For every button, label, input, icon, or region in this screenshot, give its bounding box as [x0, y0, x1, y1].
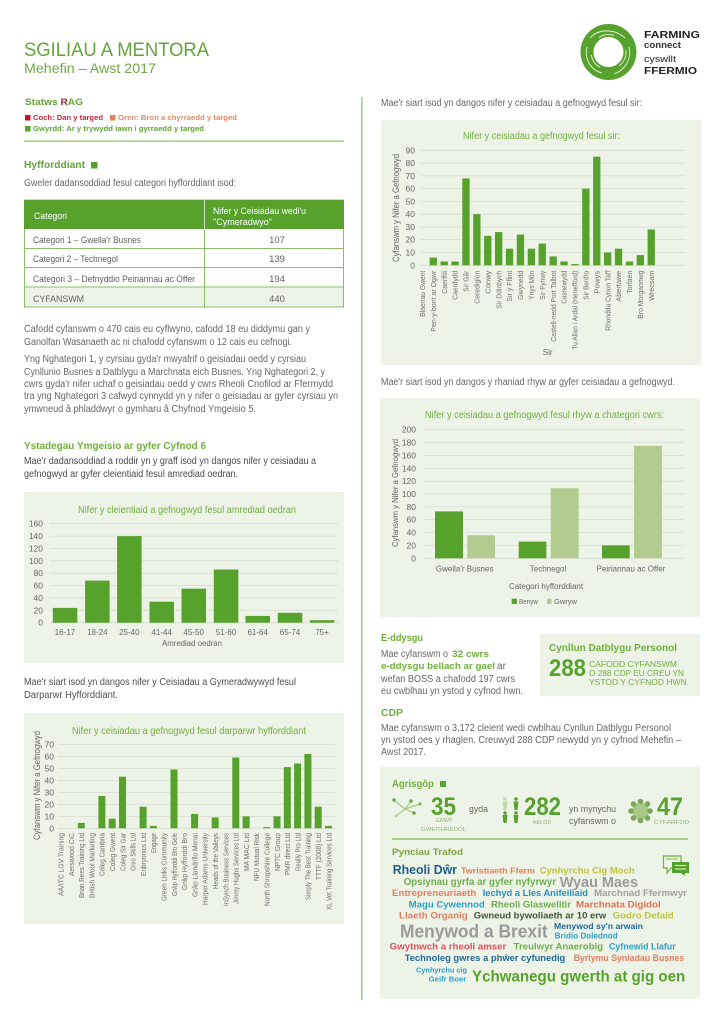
icon: people	[502, 797, 518, 823]
panel: training provider bar chart	[24, 713, 344, 924]
panel: training provider bar chart: Creo Skills Ltd	[131, 833, 138, 871]
callout: Cynllun Datblygu Personol: Cynllun Datblygu Personol	[549, 643, 677, 654]
table: categories: Categori 1 – Gwella'r Busnes	[33, 235, 141, 246]
heading: Hyfforddiant: Hyfforddiant	[24, 160, 86, 171]
table: categories: 194	[269, 274, 285, 285]
panel: county bar chart: 80	[406, 158, 415, 168]
panel: age range bar chart: 41-44	[151, 628, 172, 637]
panel: training provider bar chart: Nifer y ceisiadau a gefnogwyd fesul darparwr hyfforddiant	[72, 726, 306, 737]
section: CDP: Awst 2017.	[381, 747, 426, 758]
section: CDP: Mae cyfanswm o 3,172 cleient wedi cwblhau Cynllun Datblygu Personol	[381, 723, 671, 734]
word cloud: discussion topics: Llaeth Organig	[399, 911, 468, 922]
word cloud: discussion topics: Marchnata Digidol	[576, 900, 661, 911]
panel: gender and category bar chart: 200	[402, 425, 416, 435]
panel: county bar chart: 40	[406, 209, 415, 219]
panel: gender and category bar chart: 120	[402, 476, 416, 486]
panel: county bar chart: Gwynedd	[518, 271, 525, 300]
panel: training provider bar chart: 30	[45, 787, 54, 797]
panel: county bar chart: Ceredigion	[474, 271, 482, 304]
section: E-ddysgu	[380, 633, 523, 697]
word cloud: discussion topics: Marchnad Ffermwyr	[594, 888, 687, 899]
panel: training provider bar chart: Grŵp Llandrillo Menai	[192, 833, 199, 897]
word cloud: discussion topics: Ychwanegu gwerth at gig oen	[472, 969, 685, 986]
panel: gender and category bar chart: 60	[407, 515, 416, 525]
panel: gender and category bar chart: Gwella'r Busnes	[436, 565, 493, 574]
RAG status legend: Coch: Dan y targed	[33, 113, 103, 122]
panel: county bar chart: Casnewydd	[562, 271, 569, 304]
word cloud: discussion topics: Technoleg gwres a phŵer cyfunedig	[405, 953, 565, 964]
icon: network	[392, 798, 422, 818]
panel: training provider bar chart: North Shropshire College	[264, 833, 272, 906]
word cloud: discussion topics: Magu Cywennod	[409, 900, 485, 911]
word cloud: discussion topics: Iechyd a Lles Anifeiliaid	[483, 888, 588, 899]
panel: training provider bar chart: NPTC Group	[275, 833, 282, 871]
word cloud: discussion topics: Treulwyr Anaerobig	[514, 941, 603, 952]
callout: Cynllun Datblygu Personol	[540, 634, 700, 696]
panel: county bar chart: Bro Morgannwg	[638, 271, 645, 319]
panel: county bar chart: Sir y Fflint	[507, 271, 514, 302]
text block: summary: Ganolfan Wasanaeth ac ni chafodd cyfanswm o 12 cais eu cefnogi.	[24, 337, 292, 348]
text block: summary: tra yng Nghategori 3 cafwyd cynnydd yn y nifer o geisiadau ar gyfer cyrsiau yn	[24, 391, 338, 402]
panel: age range bar chart: 51-60	[216, 628, 237, 637]
section: E-ddysgu: eu cwblhau yn ystod y cyfnod hwn.	[381, 686, 523, 697]
panel: training provider bar chart: PMR direct Ltd	[285, 833, 292, 875]
panel: county bar chart: 90	[406, 145, 415, 155]
panel: gender and category bar chart: Cyfanswm y Nifer a Gefnogwyd	[390, 439, 400, 547]
panel: county bar chart	[381, 120, 701, 365]
panel: age range bar chart: 40	[34, 593, 43, 603]
table: categories: Categori 2 – Technegol	[33, 254, 118, 265]
table: categories: CYFANSWM	[33, 294, 84, 305]
panel: county bar chart: Sir Benfro	[584, 271, 590, 300]
table: categories: 139	[269, 254, 285, 265]
word cloud: discussion topics	[390, 863, 687, 986]
text block: summary	[24, 324, 338, 415]
panel: training provider bar chart: TTTF (2008) Ltd	[316, 833, 323, 880]
panel: training provider bar chart: Grŵp Hyfforddi Bro	[182, 833, 189, 890]
panel: age range bar chart: 25-40	[119, 628, 140, 637]
text block: summary: Cynllunio Busnes a Datblygu a Marchnata eich Busnes. Yng Nghategori 2, y	[24, 367, 325, 378]
panel: Agrisgôp: Pynciau Trafod	[392, 847, 463, 858]
callout: Cynllun Datblygu Personol: CAFODD CYFANSWM	[589, 660, 677, 669]
panel: age range bar chart: 75+	[315, 628, 329, 637]
text: gender chart intro: Mae'r siart isod yn dangos y rhaniad rhyw ar gyfer ceisiadau a gefnogwyd.	[381, 377, 675, 388]
panel: Agrisgôp: CYFARFOD	[654, 820, 689, 826]
panel: county bar chart: Caerdydd	[453, 271, 460, 300]
panel: training provider bar chart: Cyfanswm y Nifer a Gefnogwyd	[32, 731, 42, 840]
panel: training provider bar chart: 70	[45, 739, 54, 749]
panel: training provider bar chart: Coleg Cambria	[100, 833, 107, 876]
panel: training provider bar chart: Jimmy Hughs Services Ltd	[234, 833, 241, 904]
panel: training provider bar chart: Heads of the Valleys	[213, 833, 220, 889]
panel: age range bar chart: Amrediad oedran	[162, 639, 222, 648]
panel: training provider bar chart: British Wool Marketing	[89, 833, 96, 898]
panel: county bar chart: Nifer y ceisiadau a gefnogwyd fesul sir:	[463, 131, 620, 142]
section: CDP: yn ystod oes y rhaglen. Creuwyd 288 CDP newydd yn y cyfnod Mehefin –	[381, 735, 682, 746]
panel: Agrisgôp: 282	[524, 793, 561, 821]
table: categories: Nifer y Ceisiadau wedi'u	[213, 206, 306, 217]
panel: county bar chart: 70	[406, 171, 415, 181]
panel: county bar chart: Sir Ddinbych	[496, 271, 503, 309]
section: E-ddysgu: wefan BOSS a chafodd 197 cwrs	[380, 674, 515, 685]
panel: county bar chart: Sir Gâr	[464, 270, 471, 292]
text block: age intro: gefnogwyd ar gyfer cleientiaid fesul amrediad oedran.	[24, 469, 238, 480]
table: categories: Categori 3 – Defnyddio Peiriannau ac Offer	[33, 274, 195, 285]
panel: county bar chart: 30	[406, 222, 415, 232]
word cloud: discussion topics: Menywod a Brexit	[400, 921, 548, 941]
panel: training provider bar chart: Simply The Best Training	[306, 833, 313, 900]
panel: county bar chart: Abertawe	[616, 271, 623, 302]
panel: training provider bar chart: Harper Adams University	[203, 833, 210, 905]
panel: county bar chart: Powys	[594, 270, 601, 294]
panel: training provider bar chart: Green Links Community	[162, 833, 168, 901]
panel: gender and category bar chart: 40	[407, 528, 416, 538]
section: CDP	[381, 708, 682, 758]
section: E-ddysgu: E-ddysgu	[381, 633, 423, 644]
title: SGILIAU A MENTORA	[24, 40, 209, 61]
section: E-ddysgu: ar	[497, 661, 507, 672]
word cloud: discussion topics: Cyfnewid Llafur	[609, 941, 676, 952]
panel: gender and category bar chart: 100	[402, 489, 416, 499]
text block: summary: ymwneud â phladdwyr o gymharu â Chyfnod Ymgeisio 5.	[24, 404, 256, 415]
callout: Cynllun Datblygu Personol: 288	[549, 655, 586, 682]
RAG status legend	[25, 97, 237, 133]
panel: gender and category bar chart: 0	[411, 553, 416, 563]
panel: training provider bar chart: InSynch Business Services	[223, 833, 230, 906]
panel: training provider bar chart: Aerswood CiC	[69, 833, 76, 876]
heading: Ystadegau Ymgeisio: Ystadegau Ymgeisio ar gyfer Cyfnod 6	[24, 441, 206, 452]
panel: training provider bar chart: Engage	[151, 833, 158, 853]
panel: Agrisgôp: GWEITHREDOL	[421, 827, 466, 833]
panel: training provider bar chart: Coleg Sir Gar	[120, 832, 127, 871]
RAG status legend: Oren: Bron a chyrraedd y targed	[118, 113, 237, 122]
panel: county bar chart: Sir Fynwy	[540, 270, 547, 300]
table: categories	[24, 200, 344, 307]
panel: training provider bar chart: AA/ITC LGV Training	[58, 833, 66, 896]
panel: Agrisgôp: Agrisgôp	[392, 779, 434, 790]
word cloud: discussion topics: Cynhyrchu Cig Moch	[540, 866, 635, 877]
panel: county bar chart: Sir	[543, 348, 553, 357]
panel: gender and category bar chart: 160	[402, 450, 416, 460]
panel: training provider bar chart: 60	[45, 751, 54, 761]
text: county chart intro: Mae'r siart isod yn dangos nifer y ceisiadau a gefnogwyd fesul sir:	[381, 98, 642, 109]
panel: county bar chart: Castell-nedd Port Talbot	[551, 271, 558, 342]
panel: age range bar chart: 61-64	[247, 628, 268, 637]
panel: county bar chart: Ynys Môn	[529, 271, 536, 300]
panel: age range bar chart	[24, 492, 344, 663]
table: categories: "Cymeradwyo"	[213, 217, 272, 228]
logo: Farming Connect	[586, 29, 700, 77]
word cloud: discussion topics: Twristiaeth Fferm	[461, 866, 535, 876]
panel: county bar chart: Rhondda Cynon Taff	[605, 271, 612, 331]
panel: county bar chart: 20	[406, 235, 415, 245]
logo: Farming Connect: FARMING	[644, 29, 700, 41]
panel: county bar chart: Caerffili	[442, 270, 449, 294]
panel: training provider bar chart: Brian Rees Training Ltd	[79, 833, 86, 898]
panel: Agrisgôp: 47	[657, 793, 683, 821]
RAG status legend: Statws RAG	[25, 97, 83, 108]
panel: gender and category bar chart	[380, 398, 700, 617]
text block: summary: Cafodd cyfanswm o 470 cais eu cyflwyno, cafodd 18 eu diddymu gan y	[24, 324, 310, 335]
word cloud: discussion topics: Byrlymu Syniadau Busnes	[574, 953, 684, 964]
logo: Farming Connect: FFERMIO	[644, 65, 697, 77]
RAG status legend: Gwyrdd: Ar y trywydd iawn i gyrraedd y targed	[33, 124, 204, 133]
panel: age range bar chart: 0	[38, 618, 43, 628]
text block: provider intro: Darparwr Hyfforddiant.	[24, 690, 118, 701]
callout: Cynllun Datblygu Personol: O 288 CDP EU CREU YN	[589, 669, 684, 678]
title: Mehefin – Awst 2017	[24, 60, 156, 76]
panel: age range bar chart: 16-17	[55, 628, 76, 637]
word cloud: discussion topics: Gwytnwch a rheoli amser	[390, 941, 507, 952]
panel: age range bar chart: Nifer y cleientiaid a gefnogwyd fesul amrediad oedran	[78, 505, 296, 516]
panel: Agrisgôp: gyda	[469, 804, 488, 814]
panel: training provider bar chart: Grŵp Hyfforddi Bro Gele	[172, 833, 179, 896]
table: categories: Categori	[34, 211, 67, 222]
text block: provider intro	[24, 677, 296, 701]
panel: gender and category bar chart: 20	[407, 540, 416, 550]
panel: gender and category bar chart: Benyw	[519, 597, 538, 606]
intro text: Gweler dadansoddiad fesul categori hyfforddiant isod:	[24, 178, 236, 189]
panel: training provider bar chart: 20	[45, 799, 54, 809]
panel: training provider bar chart: 50	[45, 763, 54, 773]
panel: age range bar chart: 100	[29, 556, 43, 566]
panel: Agrisgôp: AELOD	[533, 820, 551, 826]
panel: gender and category bar chart: 180	[402, 438, 416, 448]
text block: age intro: Mae'r dadansoddiad a roddir yn y graff isod yn dangos nifer y ceisiadau a	[24, 456, 317, 467]
title	[24, 40, 209, 76]
word cloud: discussion topics: Rheoli Dŵr	[393, 863, 457, 877]
panel: training provider bar chart: Enbryonics Ltd	[141, 833, 148, 876]
panel: training provider bar chart: NFU Mutual Risk	[254, 833, 261, 881]
panel: age range bar chart: 80	[34, 568, 43, 578]
panel: gender and category bar chart: Categori hyfforddiant	[509, 582, 584, 591]
word cloud: discussion topics: Entrepreneuriaeth	[392, 888, 477, 899]
panel: training provider bar chart: 0	[49, 823, 54, 833]
panel: gender and category bar chart: 80	[407, 502, 416, 512]
panel: Agrisgôp: 35	[431, 793, 456, 821]
section: E-ddysgu: 32 cwrs	[452, 649, 489, 660]
panel: county bar chart: 0	[410, 260, 415, 270]
table: categories: 107	[269, 235, 285, 246]
panel: training provider bar chart: Coleg Gwent	[110, 833, 117, 871]
panel: county bar chart: 50	[406, 196, 415, 206]
section: E-ddysgu: Mae cyfanswm o	[381, 649, 448, 660]
text block: age intro	[24, 456, 317, 480]
panel: Agrisgôp: yn mynychu	[569, 804, 616, 814]
panel: county bar chart: Torfaen	[627, 271, 634, 294]
panel: county bar chart: Conwy	[485, 270, 492, 294]
panel: gender and category bar chart: Gwryw	[554, 597, 578, 606]
panel: age range bar chart: 60	[34, 581, 43, 591]
panel: county bar chart: Tu Allan i Ardal (Henefford)	[573, 271, 580, 350]
panel: Agrisgôp: cyfanswm o	[569, 816, 616, 826]
callout: Cynllun Datblygu Personol: YSTOD Y CYFNOD HWN.	[589, 678, 689, 687]
panel: age range bar chart: 120	[29, 544, 43, 554]
text block: summary: cwrs gyda'r nifer uchaf o geisiadau oedd y cwrs Rheoli Cnofilod ar Ffermydd	[24, 379, 333, 390]
panel: age range bar chart: 18-24	[87, 628, 108, 637]
panel: Agrisgôp: GRŴP	[435, 817, 453, 824]
icon: speech bubbles	[664, 856, 689, 876]
logo: Farming Connect: connect	[644, 40, 681, 50]
word cloud: discussion topics: Bridio Dolednod	[555, 932, 618, 941]
panel: county bar chart: 60	[406, 184, 415, 194]
panel: county bar chart: 10	[406, 248, 415, 258]
word cloud: discussion topics: Rheoli Glaswelltir	[491, 900, 571, 911]
word cloud: discussion topics: Opsiynau gyrfa ar gyfer nyfyrwyr	[404, 877, 556, 888]
panel: Agrisgôp	[380, 767, 700, 999]
panel: county bar chart: Pen-y-bont ar Ogwr	[431, 270, 438, 332]
panel: gender and category bar chart: 140	[402, 463, 416, 473]
word cloud: discussion topics: Menywod sy'n arwain	[554, 921, 643, 931]
panel: training provider bar chart: 10	[45, 811, 54, 821]
panel: age range bar chart: 45-50	[183, 628, 204, 637]
icon: meeting table	[628, 799, 653, 823]
text block: provider intro: Mae'r siart isod yn dangos nifer y Ceisiadau a Gymeradwywyd fesul	[24, 677, 296, 688]
logo: Farming Connect: cyswllt	[644, 54, 676, 65]
panel: age range bar chart: 140	[29, 531, 43, 541]
word cloud: discussion topics: Geifr Boer	[429, 977, 467, 984]
panel: age range bar chart: 20	[34, 605, 43, 615]
panel: county bar chart: Cyfanswm y Nifer a Gefnogwyd	[391, 154, 401, 262]
section: E-ddysgu: e-ddysgu bellach ar gael	[381, 661, 495, 672]
word cloud: discussion topics: Godro Defaid	[613, 911, 674, 922]
panel: age range bar chart: 160	[29, 519, 43, 529]
panel: gender and category bar chart: Nifer y ceisiadau a gefnogwyd fesul rhyw a chategori cwrs:	[425, 410, 664, 421]
text block: summary: Yng Nghategori 1, y cyrsiau gyda'r mwyafrif o geisiadau oedd y cyrsiau	[24, 354, 306, 365]
panel: training provider bar chart: MA MAC Ltd	[244, 833, 251, 871]
panel: training provider bar chart: Really Pro Ltd	[295, 833, 302, 871]
section: CDP: CDP	[381, 708, 403, 719]
panel: county bar chart: Wrecsam	[649, 271, 656, 301]
word cloud: discussion topics: Cynhyrchu cig	[416, 967, 467, 974]
panel: training provider bar chart: XL Vet Training Services Ltd	[326, 833, 333, 910]
word cloud: discussion topics: Gwneud bywoliaeth ar 10 erw	[474, 911, 607, 922]
table: categories: 440	[269, 294, 285, 305]
word cloud: discussion topics: Wyau Maes	[560, 874, 638, 891]
panel: gender and category bar chart: Technegol	[530, 565, 566, 574]
panel: training provider bar chart: 40	[45, 775, 54, 785]
panel: gender and category bar chart: Peiriannau ac Offer	[597, 565, 666, 574]
panel: age range bar chart: 65-74	[280, 628, 301, 637]
panel: county bar chart: Blaenau Gwent	[420, 271, 427, 317]
